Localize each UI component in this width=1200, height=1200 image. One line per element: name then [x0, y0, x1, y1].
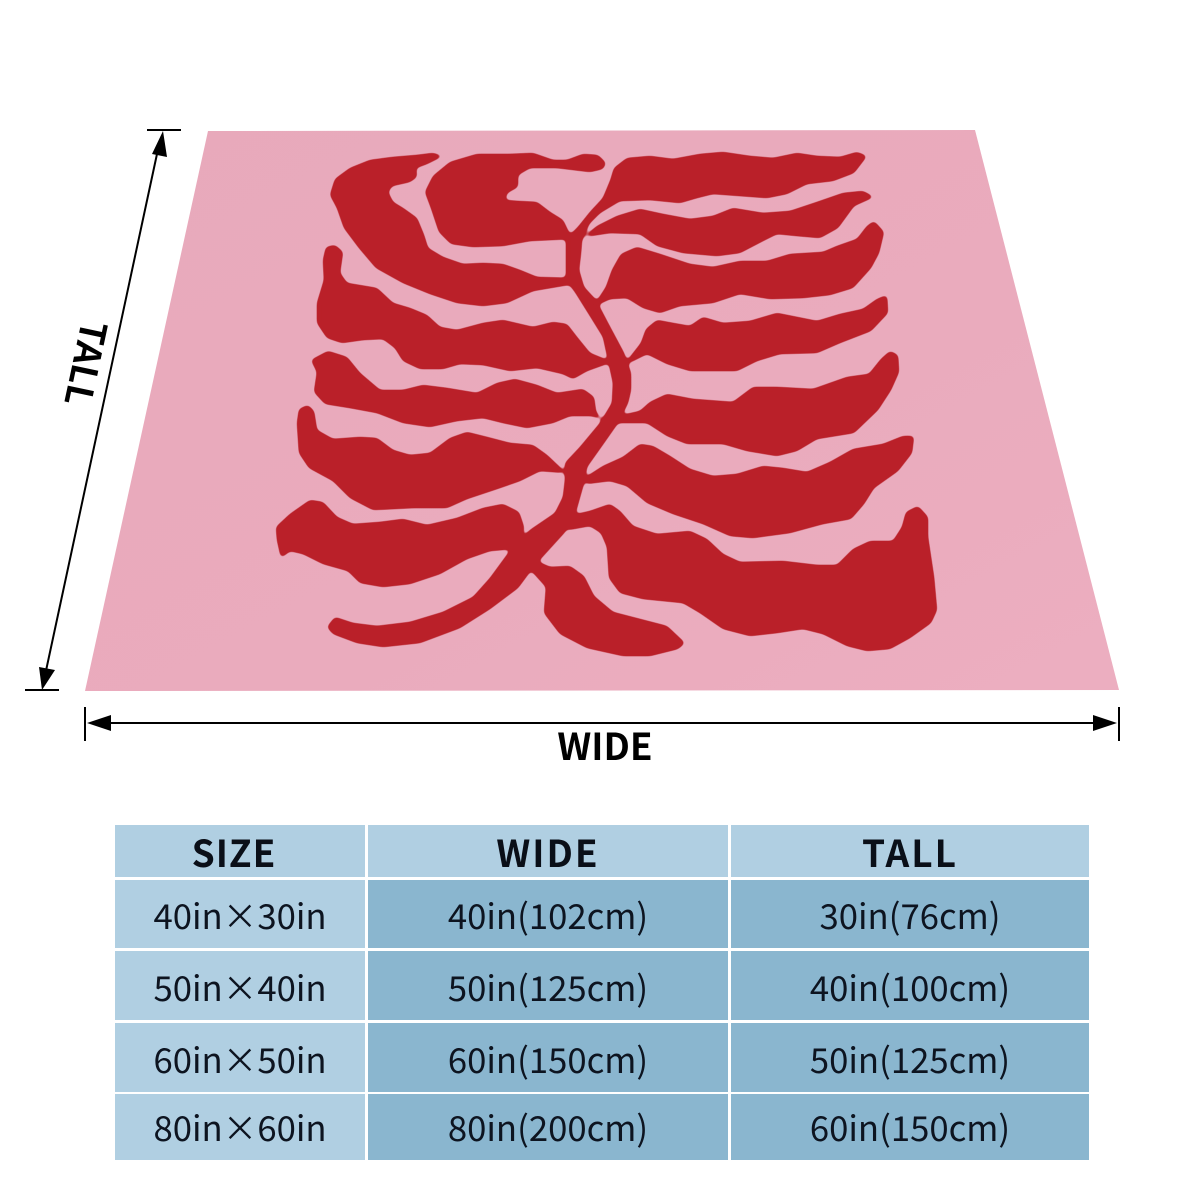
row 1 tall: [731, 880, 1089, 948]
right leaf 1: [588, 152, 867, 225]
left leaf 5: [297, 405, 566, 510]
row 4 size: 80in×60in: [153, 1101, 327, 1151]
row 3 wide: 60in(150cm): [448, 1032, 648, 1082]
label: WIDE: WIDE: [557, 717, 653, 771]
header: WIDE: [368, 825, 728, 877]
label: TALL: TALL: [53, 317, 122, 411]
row 1 size: 40in×30in: [153, 888, 327, 938]
right leaf 5: [618, 351, 899, 456]
bottom centre leaf: [528, 558, 685, 656]
row 3 tall: [731, 1023, 1089, 1092]
stem: [327, 181, 631, 647]
right leaf 4: [623, 295, 888, 371]
right leaf 2: [584, 191, 874, 256]
row 3 size: 60in×50in: [153, 1032, 327, 1082]
blanket: [85, 130, 1119, 691]
row 2 tall: [731, 951, 1089, 1020]
row 4 tall: 60in(150cm): [810, 1101, 1010, 1151]
product diagram: blanket with dimension arrows: [25, 129, 1120, 771]
arrow: tall dimension: [25, 130, 181, 690]
left leaf 2: [425, 153, 606, 247]
header: WIDE: WIDE: [496, 824, 600, 878]
right leaf 3: [593, 221, 884, 313]
row 2 wide: 50in(125cm): [448, 960, 648, 1010]
row 2 tall: 40in(100cm): [810, 960, 1010, 1010]
leaf artwork: [276, 152, 937, 656]
row 4 size: [115, 1094, 365, 1160]
row 2 size: [115, 951, 365, 1020]
arrow: wide dimension: [85, 707, 1119, 741]
row 4 wide: [368, 1094, 728, 1160]
right leaf 7: [568, 504, 937, 651]
left leaf 1: [330, 153, 574, 306]
row 4 tall: [731, 1094, 1089, 1160]
left leaf 3: [317, 245, 612, 379]
header: SIZE: [115, 825, 365, 877]
row 1 wide: 40in(102cm): [448, 888, 648, 938]
row 2 wide: [368, 951, 728, 1020]
row 1 size: [115, 880, 365, 948]
right leaf 6: [586, 436, 914, 538]
row 3 size: [115, 1023, 365, 1092]
row 1 tall: 30in(76cm): [820, 888, 1000, 938]
left leaf 4: [311, 351, 603, 428]
header: TALL: TALL: [862, 824, 958, 878]
row 3 wide: [368, 1023, 728, 1092]
left leaf 6: [276, 500, 527, 587]
row 2 size: 50in×40in: [153, 960, 327, 1010]
row 1 wide: [368, 880, 728, 948]
header: TALL: [731, 825, 1089, 877]
size table: [115, 824, 1089, 1160]
row 3 tall: 50in(125cm): [810, 1032, 1010, 1082]
row 4 wide: 80in(200cm): [448, 1101, 648, 1151]
header: SIZE: SIZE: [192, 824, 276, 878]
